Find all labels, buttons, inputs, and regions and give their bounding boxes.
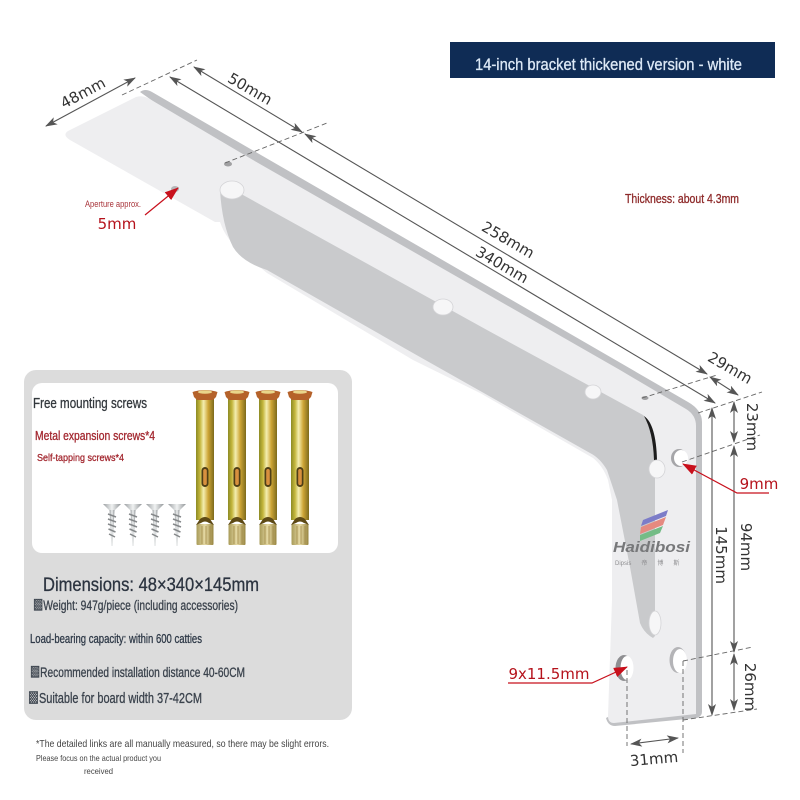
dimension: 29mm: 29mm (705, 348, 755, 388)
logo watermark: Haidibosi (613, 539, 691, 556)
dimension: 26mm (734, 654, 759, 711)
dimension: 23mm (734, 402, 761, 451)
bracket gusset web (220, 190, 655, 638)
bracket illustration (65, 90, 702, 726)
text: metal expansion screws: Metal expansion screws*4 (35, 428, 155, 443)
callout: 9mm hole: 9mm (740, 475, 778, 493)
callout: 9x11.5mm slot (508, 665, 627, 683)
gusset shadow (644, 416, 657, 460)
logo watermark: Dipsis 帝 博 斯 (615, 559, 679, 567)
dimension: 258mm: 258mm (478, 218, 538, 262)
text: installation distance: ▩Recommended installation distance 40-60CM (30, 665, 245, 680)
weld bolts (220, 181, 665, 635)
icon: expansion screws (192, 390, 312, 545)
dimension: 340mm: 340mm (472, 243, 532, 287)
bracket top flange and wall plate (65, 96, 696, 723)
footnote: received (84, 766, 113, 776)
dimension: 145mm: 145mm (712, 526, 730, 584)
callout: aperture 5mm: 5mm (98, 215, 136, 233)
dimension: 31mm: 31mm (629, 748, 679, 770)
dimension: 340mm (170, 77, 715, 403)
thickness note: Thickness: about 4.3mm (625, 192, 739, 206)
dimension: 258mm (305, 134, 707, 374)
heading: free mounting screws: Free mounting screws (33, 395, 147, 412)
dimension: 48mm: 48mm (57, 74, 109, 112)
text: board width: ▩Suitable for board width 37-42CM (28, 690, 202, 707)
footnote (36, 738, 329, 776)
dimension: 23mm: 23mm (743, 403, 761, 451)
logo stripes (640, 510, 668, 541)
dimension: 50mm: 50mm (225, 69, 275, 109)
text: load-bearing capacity: Load-bearing capacity: within 600 catties (30, 632, 202, 646)
footnote: *The detailed links are all manually measured, so there may be slight errors. (36, 738, 329, 750)
dimension: 50mm (194, 67, 302, 132)
callout: aperture 5mm (85, 188, 178, 233)
panel: specifications (24, 370, 352, 720)
dimension: 94mm: 94mm (737, 523, 755, 571)
logo watermark (613, 510, 691, 567)
text: self-tapping screws: Self-tapping screws*4 (37, 452, 124, 464)
footnote: Please focus on the actual product you (36, 753, 161, 763)
callout: aperture 5mm: Aperture approx. (85, 199, 141, 209)
dimension: 31mm (629, 738, 679, 770)
title banner: 14-inch bracket thickened version - white (475, 56, 742, 74)
dimension: 48mm (46, 74, 135, 126)
callout: 9x11.5mm slot: 9x11.5mm (508, 665, 590, 683)
text: weight: ▩Weight: 947g/piece (including accessories) (33, 598, 238, 613)
bracket thickness edge (140, 90, 702, 726)
heading: dimensions: Dimensions: 48×340×145mm (43, 574, 259, 596)
dimension guides (122, 60, 762, 753)
icon: self-tapping screws (103, 504, 186, 546)
callout: 9mm hole (683, 464, 778, 493)
panel: free screws (32, 383, 338, 553)
dimension: 26mm: 26mm (741, 663, 759, 711)
title banner (450, 42, 775, 78)
mounting holes (171, 162, 688, 681)
